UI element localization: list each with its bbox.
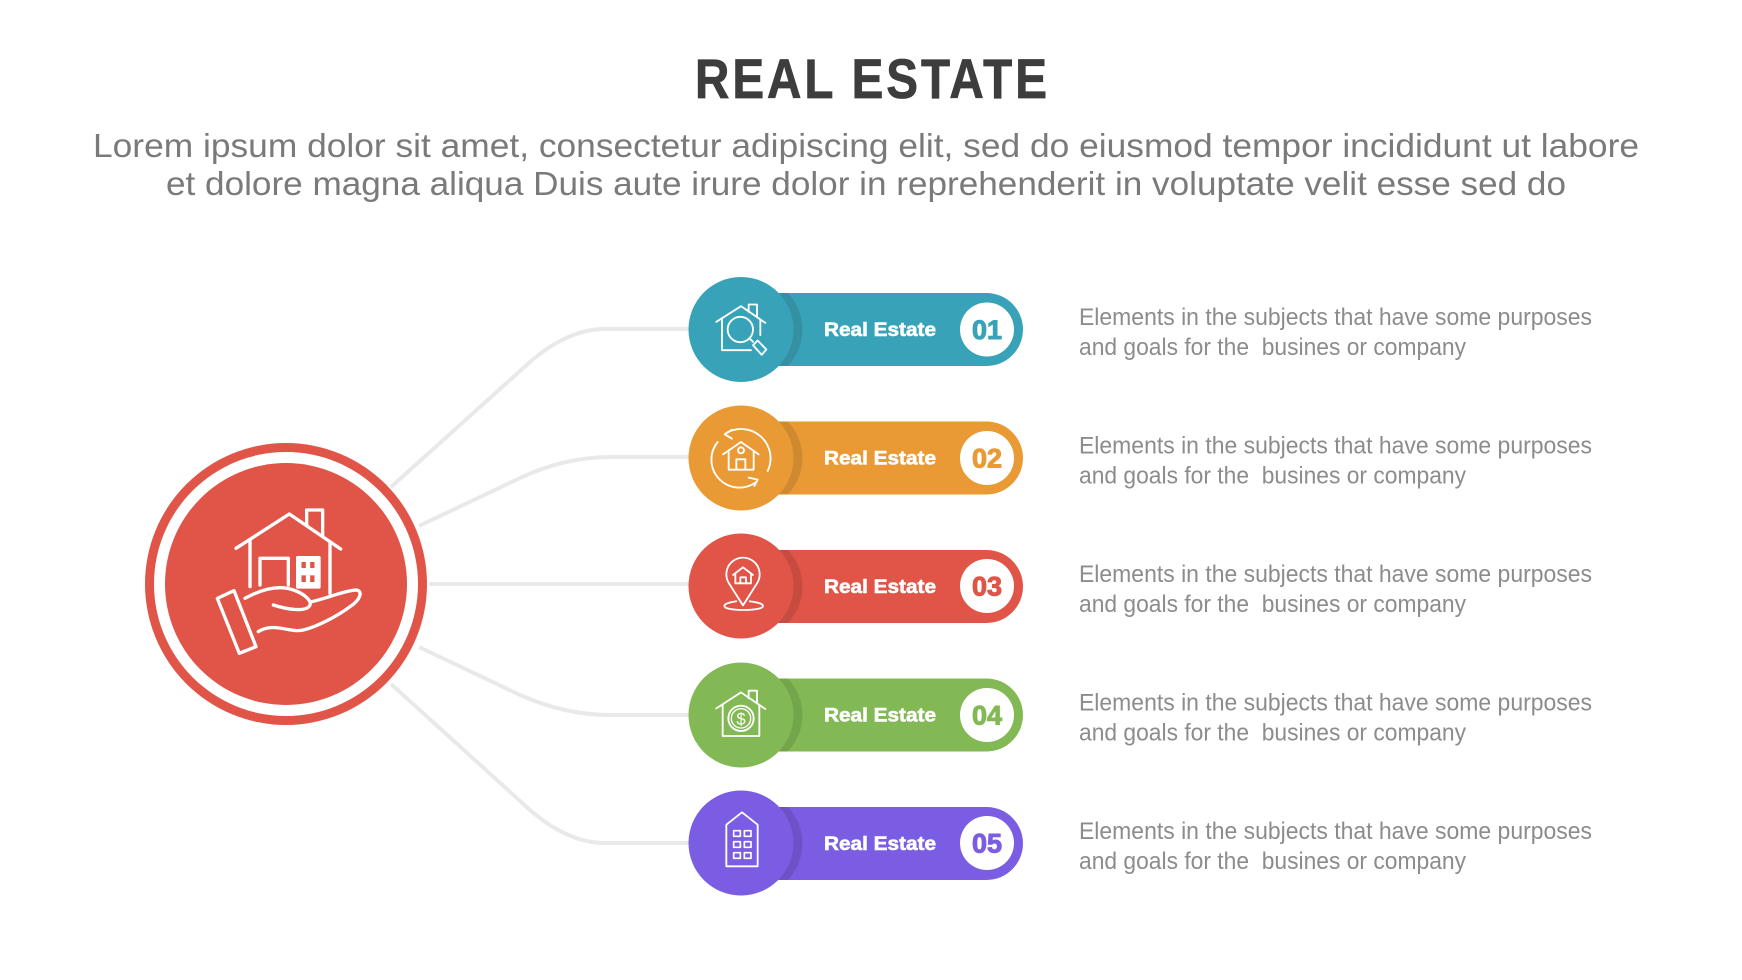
number 02: 02 (972, 444, 1002, 474)
label 03: Real Estate (824, 576, 936, 598)
circle 02 (688, 406, 794, 510)
central circle badge (145, 443, 427, 725)
number 03: 03 (972, 572, 1002, 602)
number 05 (960, 816, 1014, 870)
description 04: Elements in the subjects that have some purposes (1079, 690, 1592, 716)
subtitle: et dolore magna aliqua Duis aute irure dolor in reprehenderit in voluptate velit esse sed do (166, 165, 1566, 202)
description 05: Elements in the subjects that have some purposes (1079, 818, 1592, 845)
description 01: Elements in the subjects that have some purposes (1079, 304, 1592, 331)
crescent shadow 02 (741, 422, 802, 494)
circle 03 (688, 534, 794, 638)
icon: house with dollar coin (716, 691, 765, 736)
label 01: Real Estate (824, 319, 936, 341)
crescent shadow 01 (741, 293, 802, 366)
description 01: and goals for the busines or company (1079, 334, 1466, 361)
crescent shadow 04 (741, 678, 802, 752)
icon: location pin with house (724, 558, 763, 610)
icon: house on open hand (217, 510, 360, 653)
description 02 (1079, 432, 1592, 490)
number 05: 05 (972, 828, 1002, 858)
connector lines (391, 329, 700, 843)
circle 05 (688, 790, 794, 896)
icon: apartment building (726, 812, 758, 866)
number 01 (960, 302, 1014, 356)
pill bar 02 (741, 422, 1023, 494)
number 03 (960, 559, 1014, 613)
icon: house with dollar coin: $ (736, 709, 746, 728)
item 04 (688, 662, 1023, 768)
pill bar 04 (741, 678, 1023, 752)
description 05 (1079, 818, 1592, 875)
pill bar 05 (741, 807, 1023, 880)
item 03 (688, 534, 1023, 638)
label 05: Real Estate (824, 833, 936, 855)
subtitle: Lorem ipsum dolor sit amet, consectetur adipiscing elit, sed do eiusmod tempor incididunt ut labore (93, 127, 1639, 164)
circle 04 (688, 662, 794, 768)
item 02 (688, 406, 1023, 510)
description 01 (1079, 304, 1592, 361)
icon: house with cycle arrows (711, 429, 771, 488)
subtitle (93, 127, 1639, 202)
circle 01 (688, 277, 794, 382)
description 02: and goals for the busines or company (1079, 462, 1466, 490)
crescent shadow 03 (741, 550, 802, 623)
number 04 (960, 688, 1014, 742)
pill bar 01 (741, 293, 1023, 366)
description 04: and goals for the busines or company (1079, 720, 1466, 746)
title: REAL ESTATE (695, 48, 1047, 111)
description 05: and goals for the busines or company (1079, 848, 1466, 875)
number 02 (960, 431, 1014, 485)
icon: house magnifier (716, 305, 766, 355)
description 02: Elements in the subjects that have some purposes (1079, 432, 1592, 460)
description 03 (1079, 561, 1592, 618)
number 01: 01 (972, 315, 1002, 345)
item 05 (688, 790, 1023, 896)
item 01 (688, 277, 1023, 382)
number 04: 04 (972, 700, 1002, 730)
pill bar 03 (741, 550, 1023, 623)
description 03: Elements in the subjects that have some purposes (1079, 561, 1592, 588)
description 04 (1079, 690, 1592, 746)
label 04: Real Estate (824, 704, 936, 726)
crescent shadow 05 (741, 807, 802, 880)
label 02: Real Estate (824, 448, 936, 470)
description 03: and goals for the busines or company (1079, 591, 1466, 618)
